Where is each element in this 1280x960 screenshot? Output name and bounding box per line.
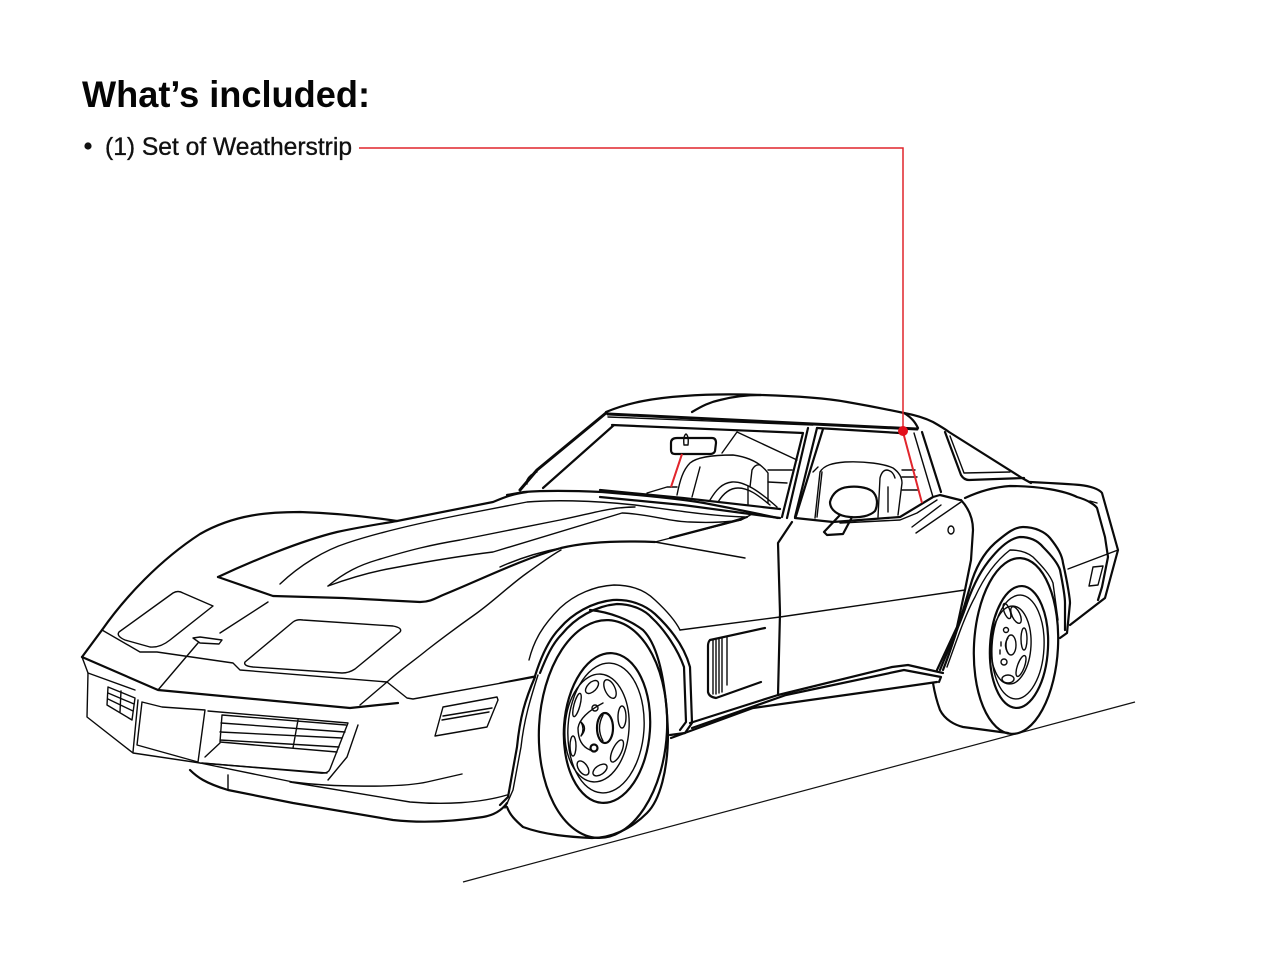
ground line [463,702,1135,882]
windshield, roof and pillars [520,394,1031,538]
title: What’s included: [82,74,370,115]
icon: side mirror [824,487,877,535]
hood and front body [102,491,778,682]
icon: headlight left [118,592,213,647]
door and body side [671,495,973,738]
icon: turn signal [435,697,498,736]
icon: headlight right [245,620,401,673]
car line drawing [82,394,1118,841]
list item: weatherstrip: (1) Set of Weatherstrip [105,133,352,161]
interior seats and wheel [671,432,918,518]
front wheel arch [500,585,692,808]
rear body [965,482,1118,625]
weatherstrip highlight [671,426,922,503]
red callout line [359,148,903,430]
rear wheel arch [940,527,1070,670]
rear wheel [933,556,1063,736]
front wheel [507,610,673,841]
front bumper [82,602,535,822]
